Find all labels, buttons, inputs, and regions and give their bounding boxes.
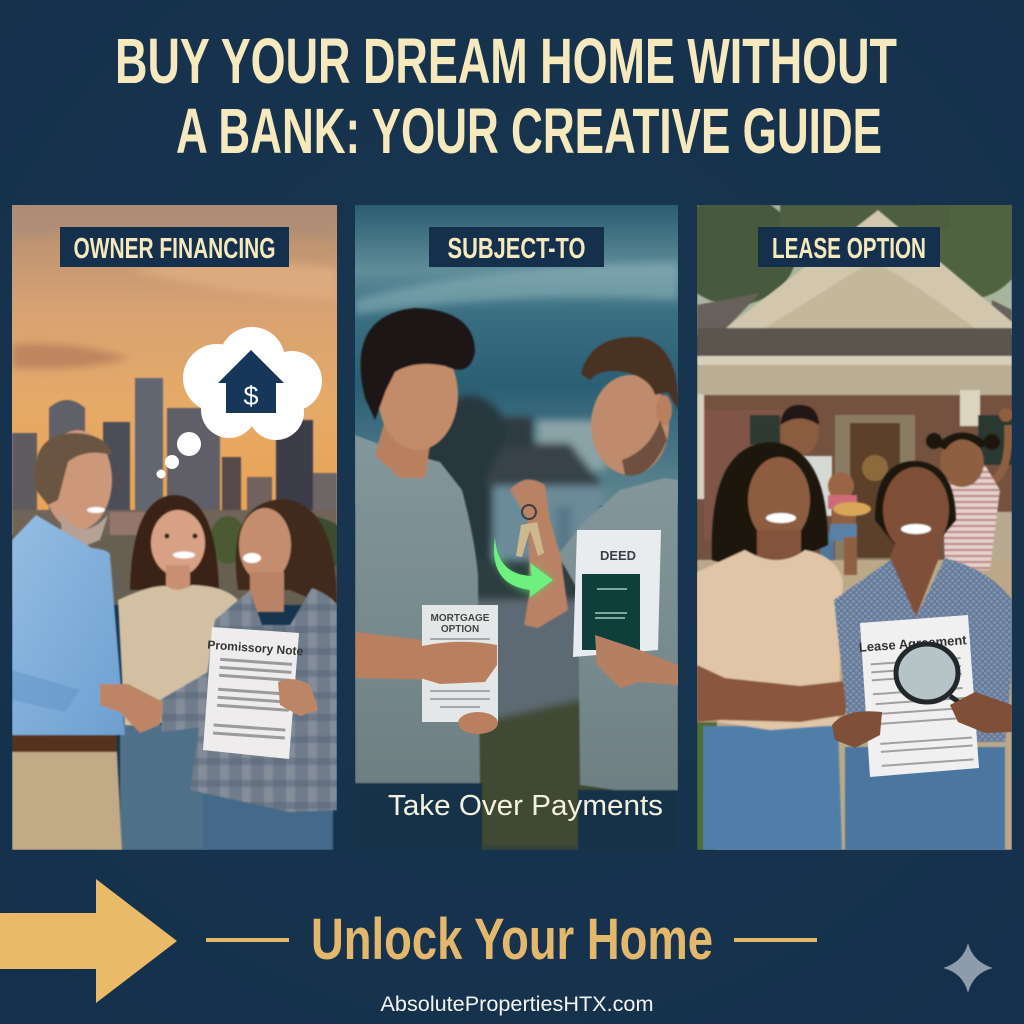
document: deed: DEED	[600, 548, 636, 563]
document: lease agreement	[858, 615, 979, 777]
dusk sky, house and street	[355, 205, 678, 850]
panel: owner financing	[12, 205, 350, 850]
sunset sky and skyline	[12, 205, 350, 605]
person: woman in beige	[697, 442, 853, 850]
arrow: gold right	[0, 879, 177, 1003]
document: mortgage option: MORTGAGE	[431, 613, 490, 624]
house	[697, 210, 1012, 850]
icon: thought cloud with house and dollar	[156, 327, 322, 478]
caption: take over payments: Take Over Payments	[388, 790, 663, 822]
icon: thought cloud with house and dollar: $	[243, 381, 259, 411]
person: young man curly hair	[355, 308, 497, 850]
label: lease option: LEASE OPTION	[772, 233, 926, 265]
trees and sky	[697, 205, 1012, 336]
icon: sparkle	[943, 943, 993, 993]
label: owner financing: OWNER FINANCING	[74, 233, 276, 265]
label: subject-to	[429, 227, 604, 267]
document: promissory note	[203, 627, 304, 759]
icon: magnifying glass	[896, 644, 960, 703]
arrow: green curved	[494, 537, 553, 597]
title	[115, 25, 897, 167]
website: AbsolutePropertiesHTX.com	[380, 993, 654, 1016]
document: mortgage option	[422, 605, 498, 722]
label: lease option	[758, 227, 940, 267]
hand holding note	[278, 679, 318, 716]
person: woman with note	[160, 499, 337, 850]
hands holding documents	[420, 635, 678, 734]
child: girl waving	[926, 408, 1013, 570]
document: mortgage option: OPTION	[441, 624, 479, 635]
person: man in blue shirt	[12, 430, 163, 850]
document: lease agreement: Lease Agreement	[858, 632, 968, 655]
person: woman in centre	[118, 495, 238, 850]
hands on document	[832, 692, 1012, 748]
child: boy behind	[780, 405, 834, 560]
icon: keys	[516, 505, 544, 557]
document: promissory note: Promissory Note	[207, 638, 304, 658]
panel: lease option	[697, 205, 1012, 850]
label: owner financing	[60, 227, 289, 267]
document: deed	[573, 530, 661, 657]
panel: subject-to	[355, 205, 678, 850]
banner: unlock your home: Unlock Your Home	[311, 907, 713, 972]
person: man with beard	[510, 337, 678, 850]
label: subject-to: SUBJECT-TO	[448, 233, 586, 265]
person: woman with magnifier	[834, 461, 1012, 850]
child: small child with toy	[828, 472, 871, 575]
